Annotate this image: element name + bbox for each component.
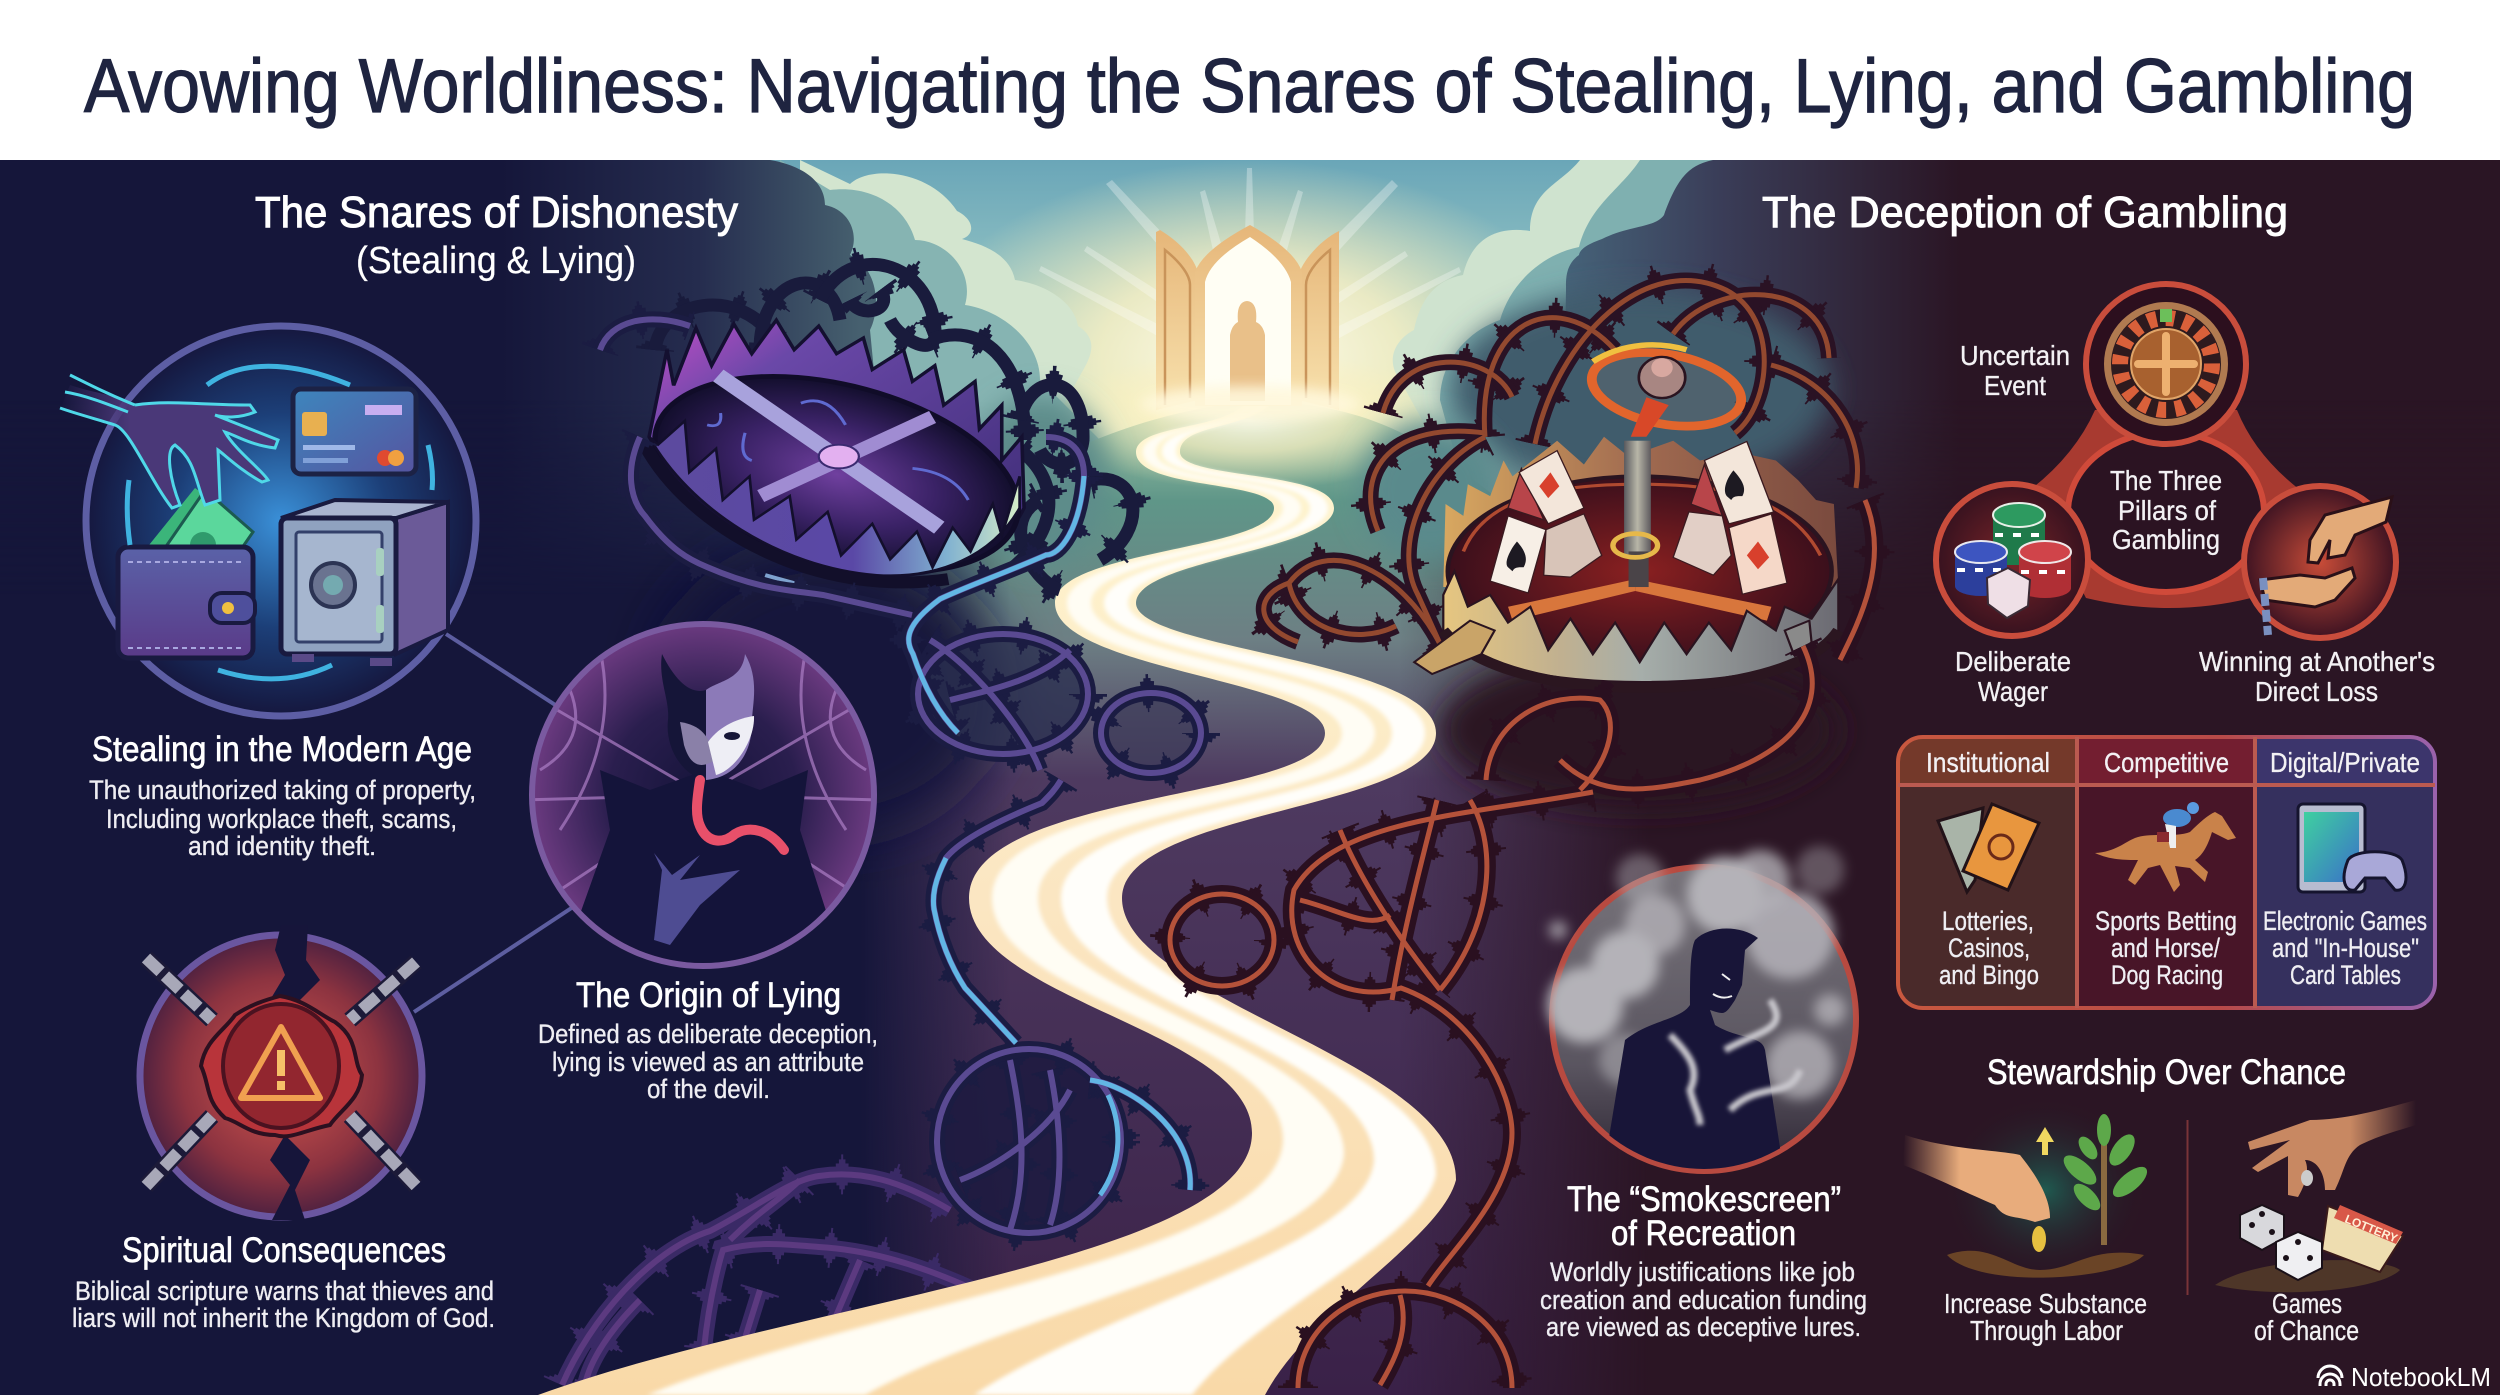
thorn vines: gambling, lower	[1170, 500, 1875, 1388]
text: stealing in the modern age	[89, 730, 476, 861]
labels: three pillars: Wager	[1978, 676, 2048, 707]
icon: stealing circle	[60, 326, 476, 716]
background scene	[574, 160, 2500, 1395]
panel: the snares of dishonesty	[60, 188, 880, 1333]
bear trap with card houses: gambling	[1414, 341, 1838, 688]
text: the smokescreen of recreation: are viewed as deceptive lures.	[1546, 1312, 1861, 1342]
labels: three pillars: Direct Loss	[2255, 676, 2378, 707]
cell: digital and private: Card Tables	[2290, 960, 2401, 990]
text: spiritual consequences: liars will not inherit the Kingdom of God.	[72, 1303, 495, 1333]
table: gambling categories	[1898, 737, 2435, 1008]
text: spiritual consequences: Biblical scripture warns that thieves and	[75, 1276, 494, 1306]
icon: wallet	[118, 547, 255, 658]
cell: competitive: Sports Betting	[2095, 906, 2237, 936]
icon: hand planting a seed	[1903, 1095, 2152, 1285]
cell: institutional: Casinos,	[1948, 933, 2030, 963]
thorn nest: gambling, back	[1264, 281, 1857, 646]
title bar	[0, 0, 2500, 160]
labels: stewardship options: Through Labor	[1970, 1315, 2123, 1346]
text: stealing in the modern age: Including workplace theft, scams,	[106, 804, 457, 834]
diagram: three pillars connector: Gambling	[2112, 524, 2220, 555]
icon: credit card	[293, 389, 416, 474]
icon: figure in smokescreen	[1547, 846, 1856, 1180]
text: the smokescreen of recreation: of Recreation	[1611, 1214, 1796, 1253]
divider	[2186, 1120, 2188, 1295]
thorn nest: dishonesty, back	[655, 264, 1133, 590]
labels: three pillars: Uncertain	[1960, 340, 2070, 371]
heading: the snares of dishonesty	[255, 188, 738, 282]
text: stealing in the modern age: The unauthorized taking of property,	[89, 775, 476, 805]
labels: three pillars: Event	[1984, 370, 2046, 401]
icon: roulette wheel	[2086, 284, 2246, 444]
cell: institutional	[1926, 747, 2050, 990]
connector: stealing to lying	[446, 634, 563, 710]
text: stealing in the modern age: Stealing in the Modern Age	[92, 730, 472, 769]
text: spiritual consequences	[72, 1231, 495, 1333]
text: the smokescreen of recreation: The “Smokescreen”	[1567, 1180, 1841, 1219]
cell: competitive: Dog Racing	[2111, 960, 2223, 990]
cell: institutional: Lotteries,	[1942, 906, 2034, 936]
cell: digital and private: Digital/Private	[2270, 747, 2420, 778]
panel: the deception of gambling	[1540, 188, 2435, 1346]
cell: digital and private	[2263, 747, 2427, 990]
thorn vines: lower left	[562, 1174, 975, 1385]
bear trap: dishonesty	[628, 320, 1045, 615]
cell: competitive	[2095, 747, 2237, 990]
icon: ghostly hand	[60, 366, 432, 679]
labels: three pillars	[1955, 340, 2435, 707]
heading: the deception of gambling: The Deception of Gambling	[1762, 188, 2288, 237]
text: the smokescreen of recreation	[1540, 1180, 1867, 1342]
icon: mask and web circle	[520, 624, 880, 970]
glowing winding road	[538, 405, 1456, 1395]
text: the smokescreen of recreation: creation and education funding	[1540, 1285, 1867, 1315]
diagram: three pillars connector	[2030, 410, 2300, 608]
heading: the snares of dishonesty: (Stealing & Lying)	[356, 240, 636, 282]
labels: three pillars: Deliberate	[1955, 646, 2071, 677]
text: the origin of lying: Defined as deliberate deception,	[538, 1019, 878, 1049]
cell: competitive: and Horse/	[2111, 933, 2220, 963]
heading: stewardship over chance: Stewardship Over Chance	[1987, 1053, 2346, 1092]
text: the smokescreen of recreation: Worldly justifications like job	[1550, 1257, 1855, 1287]
diagram: three pillars connector: Pillars of	[2118, 495, 2216, 526]
icon: broken seal with chains	[140, 925, 422, 1220]
text: spiritual consequences: Spiritual Consequences	[122, 1231, 446, 1270]
labels: stewardship options	[1944, 1288, 2359, 1346]
cell: institutional: Institutional	[1926, 747, 2050, 778]
connector: lying to consequences	[414, 907, 573, 1012]
icon: cash	[141, 488, 253, 558]
labels: three pillars: Winning at Another's	[2199, 646, 2435, 677]
labels: stewardship options: Increase Substance	[1944, 1288, 2147, 1319]
text: the origin of lying	[538, 976, 878, 1104]
icon: hands exchanging money	[2244, 486, 2396, 638]
glowing doorway with figure	[1140, 225, 1360, 422]
icon: poker chips and die	[1936, 484, 2088, 636]
text: stealing in the modern age: and identity theft.	[188, 831, 376, 861]
heading: the snares of dishonesty: The Snares of Dishonesty	[255, 188, 738, 237]
icon: hand dropping dice and lottery ticket: LOTTERY	[2343, 1212, 2400, 1246]
cell: competitive: Competitive	[2104, 747, 2229, 778]
thorn vines: dishonesty	[600, 319, 1201, 1233]
cell: digital and private: Electronic Games	[2263, 906, 2427, 936]
text: the origin of lying: lying is viewed as an attribute	[552, 1047, 864, 1077]
logo: notebooklm: NotebookLM	[2351, 1362, 2491, 1392]
icon: hand dropping dice and lottery ticket	[2215, 1100, 2416, 1292]
cell: digital and private: and "In-House"	[2272, 933, 2419, 963]
diagram: three pillars connector: The Three	[2110, 465, 2222, 496]
cell: institutional: and Bingo	[1939, 960, 2039, 990]
text: the origin of lying: The Origin of Lying	[576, 976, 841, 1015]
labels: stewardship options: of Chance	[2254, 1315, 2359, 1346]
thorn ring backings: dishonesty	[918, 634, 1201, 1233]
icon: safe	[281, 500, 448, 666]
labels: stewardship options: Games	[2272, 1288, 2342, 1319]
text: the origin of lying: of the devil.	[647, 1074, 770, 1104]
